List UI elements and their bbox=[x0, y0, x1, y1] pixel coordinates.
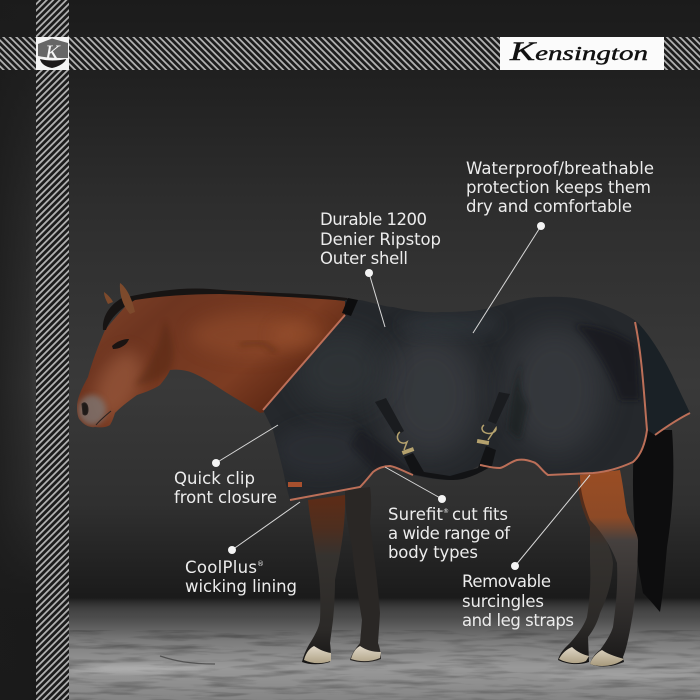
stripe band: vertical bbox=[36, 0, 69, 700]
near rear leg bbox=[580, 470, 638, 666]
blanket rear flap bbox=[637, 322, 690, 435]
ground: sand arena bbox=[69, 598, 700, 700]
horse bbox=[77, 283, 690, 666]
callout: waterproof: dry and comfortable bbox=[466, 197, 632, 216]
blanket body bbox=[263, 297, 647, 500]
callout: CoolPlus lining: ® bbox=[257, 560, 264, 568]
callout: waterproof: Waterproof/breathable bbox=[466, 159, 654, 178]
near front leg bbox=[302, 495, 345, 664]
callout: front closure: front closure bbox=[174, 488, 277, 507]
far rear leg bbox=[558, 480, 613, 664]
tail bbox=[633, 430, 673, 612]
ears bbox=[104, 283, 135, 314]
callout: Surefit cut: cut fits bbox=[452, 505, 508, 524]
logo: Kensington wordmark: K ensington bbox=[509, 37, 648, 66]
far front leg bbox=[345, 487, 381, 662]
callout: surcingles and leg straps: and leg straps bbox=[462, 611, 574, 630]
callout: waterproof: protection keeps them bbox=[466, 178, 651, 197]
stripe band: horizontal bbox=[0, 37, 700, 70]
callout: Surefit cut: Surefit bbox=[388, 505, 444, 524]
eye bbox=[112, 339, 129, 349]
callout: Surefit cut: body types bbox=[388, 543, 478, 562]
blanket shading bbox=[308, 318, 640, 470]
blanket trim bbox=[263, 315, 690, 500]
blanket label bbox=[288, 482, 302, 487]
callout: CoolPlus lining: wicking lining bbox=[185, 577, 297, 596]
coat highlights bbox=[78, 313, 328, 426]
callout: Surefit cut: ® bbox=[443, 508, 449, 515]
hooves bbox=[304, 646, 624, 666]
mane bbox=[103, 289, 350, 330]
callout: surcingles and leg straps bbox=[462, 475, 590, 630]
icon: K shield logo: K bbox=[44, 40, 61, 65]
nostril and mouth bbox=[82, 403, 111, 425]
neck and head bbox=[77, 290, 350, 427]
callout: ripstop shell: Denier Ripstop bbox=[320, 230, 441, 249]
left dark margin bbox=[0, 0, 36, 700]
callout: ripstop shell bbox=[320, 210, 441, 327]
callout: front closure: Quick clip bbox=[174, 469, 255, 488]
callout: ripstop shell: Outer shell bbox=[320, 249, 408, 268]
callout: waterproof bbox=[466, 159, 654, 333]
callout: CoolPlus lining bbox=[185, 502, 300, 596]
callout: front closure bbox=[174, 425, 278, 507]
callout: Surefit cut: a wide range of bbox=[388, 524, 511, 543]
callout: surcingles and leg straps: Removable bbox=[462, 572, 551, 591]
surcingle straps and gold clips bbox=[375, 392, 510, 480]
callout: CoolPlus lining: CoolPlus bbox=[185, 558, 257, 577]
icon: K shield logo bbox=[36, 37, 69, 70]
callout: Surefit cut bbox=[385, 467, 511, 562]
neck strap bbox=[342, 298, 358, 316]
callout: ripstop shell: Durable 1200 bbox=[320, 210, 427, 229]
logo: Kensington wordmark bbox=[500, 37, 664, 70]
callout: surcingles and leg straps: surcingles bbox=[462, 592, 544, 611]
